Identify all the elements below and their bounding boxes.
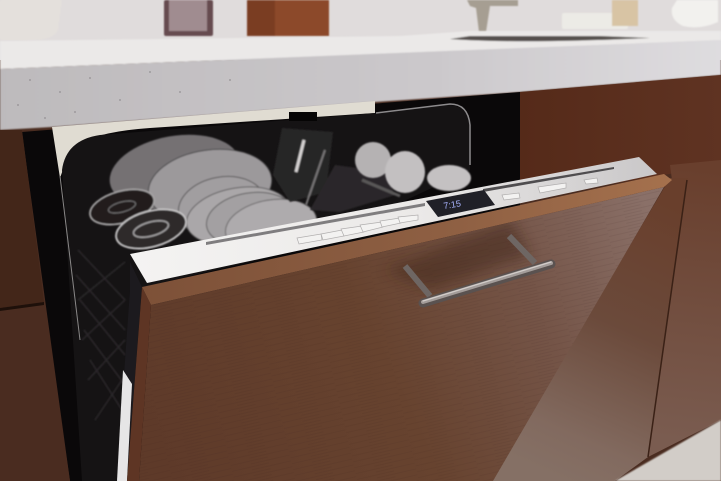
panel body	[130, 157, 657, 283]
latch	[289, 112, 317, 121]
mugs upper rack	[355, 142, 471, 193]
wooden block	[247, 0, 329, 36]
left cabinet lower	[0, 305, 70, 481]
door side edge	[127, 287, 151, 481]
lower rack	[76, 250, 125, 420]
tub side line	[60, 176, 80, 340]
mug	[672, 0, 718, 27]
wood grain	[139, 187, 664, 481]
door side strip	[120, 262, 142, 481]
handle shadow	[385, 220, 530, 290]
vase	[0, 0, 62, 40]
sink	[450, 36, 650, 41]
countertop	[0, 31, 721, 130]
backsplash objects	[0, 0, 718, 40]
program buttons	[297, 178, 598, 244]
gap line between cabinet doors	[648, 180, 687, 457]
dishes on counter	[562, 13, 628, 29]
right upper cabinet	[520, 75, 721, 200]
lower centre cabinet door	[490, 178, 688, 481]
time text: 7:15	[443, 198, 462, 211]
front edge	[0, 40, 721, 130]
wood top edge of door	[142, 174, 672, 305]
dark glass jar	[164, 0, 213, 36]
door front	[139, 187, 664, 481]
display	[426, 190, 495, 217]
left cabinet upper	[0, 130, 44, 308]
right lower cabinet door	[648, 160, 721, 457]
dark slot	[206, 203, 425, 245]
door handle	[405, 236, 551, 303]
handle posts	[405, 266, 430, 296]
handle bar	[423, 264, 551, 303]
rack door stripe	[376, 104, 470, 165]
dishwasher opening	[22, 92, 520, 481]
faucet	[467, 0, 518, 32]
glasses upper rack	[273, 128, 400, 212]
wine glasses	[86, 183, 190, 256]
left cabinet seam	[0, 302, 44, 312]
tub interior	[62, 105, 470, 481]
control panel	[130, 157, 657, 283]
back wall	[0, 0, 721, 60]
floor	[615, 420, 721, 481]
top surface	[0, 31, 721, 69]
tub frame cream strip	[52, 101, 375, 178]
white door liner	[117, 370, 132, 481]
plates	[104, 125, 321, 260]
